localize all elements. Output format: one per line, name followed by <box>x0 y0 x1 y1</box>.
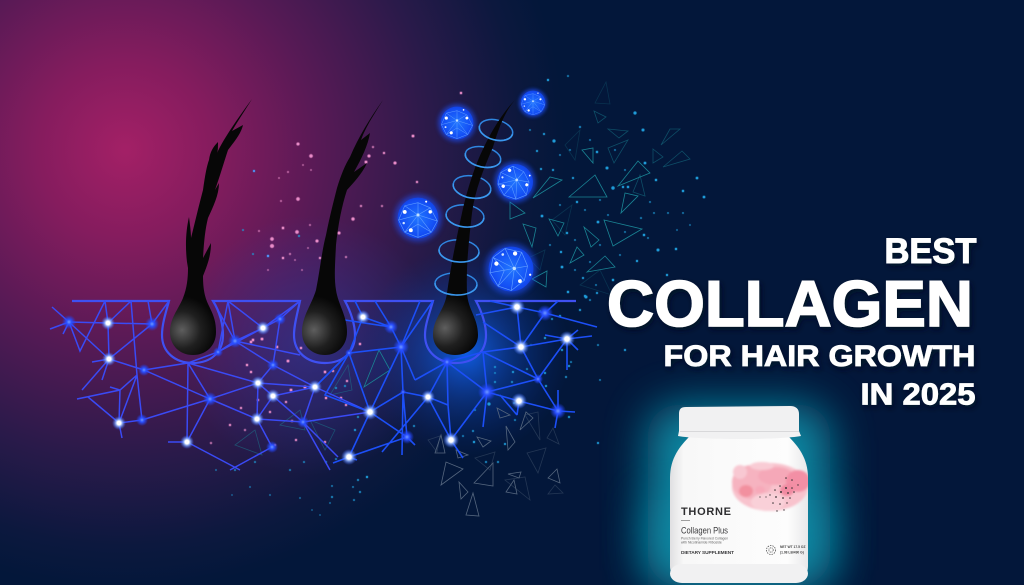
sphere 4 <box>395 195 441 241</box>
logo mark <box>766 546 776 554</box>
brand name: THORNE <box>681 506 731 518</box>
glowing network nodes: blue <box>62 305 566 453</box>
pink splash artwork <box>732 462 810 512</box>
sphere 3 <box>486 153 544 211</box>
teal triangle fragments <box>235 82 690 455</box>
lid shadow line <box>680 431 799 432</box>
blue energy rings behind healthy hair <box>435 116 515 296</box>
jar bottom shading <box>670 564 808 583</box>
net weight: (1.08 LB/490 G) <box>780 550 804 554</box>
blue energy rings in front of healthy hair <box>435 126 512 296</box>
net weight: NET WT 17.5 OZ <box>780 545 805 549</box>
brand divider <box>681 519 690 522</box>
product description: with Nicotinamide Riboside <box>681 540 722 544</box>
jar lid <box>678 406 801 439</box>
hair follicle: damaged hair 2 <box>302 100 383 355</box>
teal glow behind product <box>648 405 830 585</box>
skin surface line with follicle pockets <box>72 301 576 363</box>
title line: IN 2025: IN 2025 <box>860 376 976 412</box>
scalp tissue network <box>50 299 597 470</box>
product name: Collagen Plus <box>681 526 728 536</box>
scattered pink particles <box>210 92 462 446</box>
sphere 2 <box>519 89 547 117</box>
product description <box>681 536 728 544</box>
hair follicle: healthy hair 3 <box>433 100 515 355</box>
glowing collagen spheres <box>395 89 547 299</box>
title line: BEST: BEST <box>884 232 976 271</box>
sphere 1 <box>438 104 476 142</box>
product description: Punch Berry Flavored Collagen <box>681 536 728 540</box>
scattered cyan particles <box>215 75 705 515</box>
title <box>607 232 976 412</box>
title line: FOR HAIR GROWTH: FOR HAIR GROWTH <box>664 340 976 373</box>
sphere 5 <box>481 239 541 299</box>
net weight <box>780 545 805 554</box>
title line: COLLAGEN: COLLAGEN <box>607 267 973 340</box>
network lines <box>50 301 370 470</box>
jar body <box>670 436 808 583</box>
hair follicle: damaged hair 1 <box>170 99 252 355</box>
grey triangle fragments <box>428 408 563 516</box>
dietary supplement label: DIETARY SUPPLEMENT <box>681 550 734 556</box>
seed dots <box>759 477 799 512</box>
glowing network nodes: white <box>101 299 575 465</box>
product jar: Thorne Collagen Plus <box>670 406 810 583</box>
